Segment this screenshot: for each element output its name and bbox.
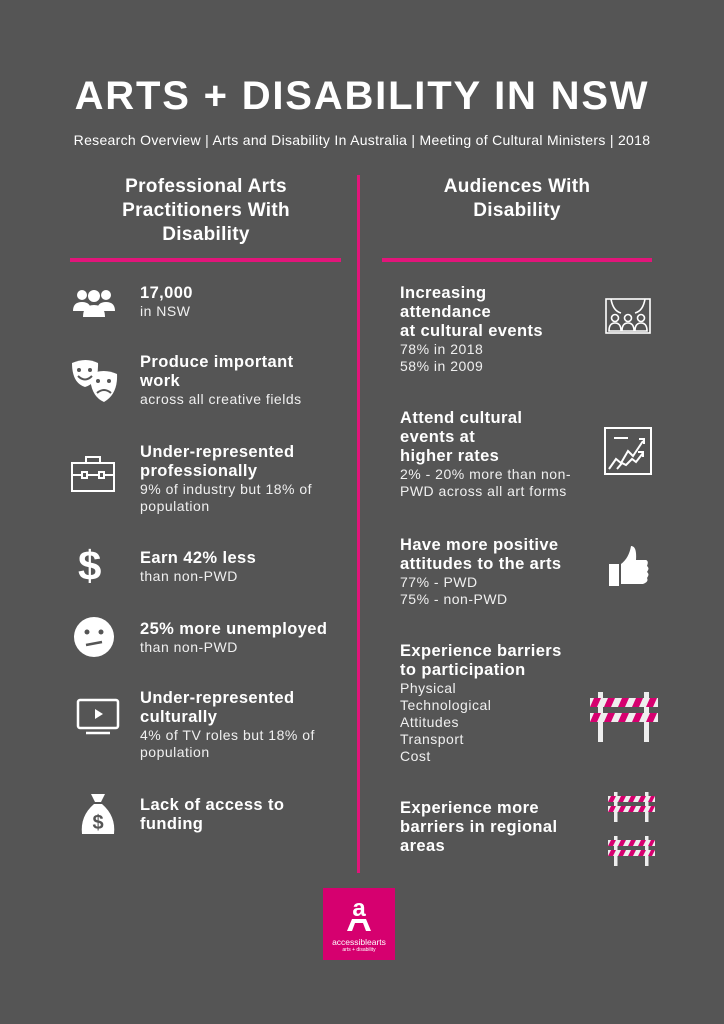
text: under-represented professionally: population [140,498,210,514]
text: unemployed [140,620,327,655]
text: positive attitudes: 75% - non-PWD [400,591,508,607]
heading: practitioners: Disability [162,224,250,245]
text: produce important work: work [140,372,180,390]
text: 17,000 [140,284,193,319]
text: under-represented professionally [140,443,312,514]
text: under-represented culturally: culturally [140,708,217,726]
text: 17,000: in NSW [140,303,190,319]
text: under-represented professionally: professionally [140,462,257,480]
text: barriers: Technological [400,697,491,713]
text: barriers: Cost [400,748,431,764]
text: positive attitudes: attitudes to the arts [400,555,562,573]
text: earn less: Earn 42% less [140,549,256,567]
vertical divider [357,175,360,873]
text: increasing attendance [400,284,543,374]
text: barriers: Experience barriers [400,642,562,660]
icon: masks [72,360,118,402]
text: under-represented professionally: Under-represented [140,443,294,461]
text: produce important work: Produce important [140,353,293,371]
icon: money bag [82,794,114,834]
icon: barriers small [608,792,655,866]
text: produce important work: across all creative fields [140,391,302,407]
text: under-represented culturally: population [140,744,210,760]
text: regional barriers [400,799,557,855]
title: ARTS + DISABILITY IN NSW [75,74,649,118]
panel: practitioners [71,284,327,834]
text: positive attitudes: 77% - PWD [400,574,478,590]
text: attend at higher rates: Attend cultural [400,409,522,427]
icon: barrier large [590,692,658,742]
text: under-represented professionally: 9% of industry but 18% of [140,481,312,497]
icon: briefcase [71,456,115,492]
icon: chart [604,427,652,475]
text: under-represented culturally: Under-represented [140,689,294,707]
text: increasing attendance: 58% in 2009 [400,358,483,374]
icon: theatre [605,298,651,334]
text: increasing attendance: attendance [400,303,491,321]
panel: audiences [400,284,658,866]
text: increasing attendance: at cultural events [400,322,543,340]
heading: practitioners: Practitioners With [122,200,290,221]
icon: dollar: $ [78,542,101,589]
text: lack of funding: Lack of access to [140,796,284,814]
icon: people [73,290,115,317]
text: barriers [400,642,562,764]
text: regional barriers: areas [400,837,445,855]
text: positive attitudes [400,536,562,607]
text: increasing attendance: 78% in 2018 [400,341,483,357]
text: earn less [140,549,256,584]
heading: audiences: Audiences With [444,176,590,197]
text: barriers: to participation [400,661,526,679]
text: attend at higher rates: higher rates [400,447,499,465]
logo: accessible arts: arts + disability [342,947,376,953]
logo: accessible arts: a [352,895,366,922]
text: 17,000: 17,000 [140,284,193,302]
text: barriers: Physical [400,680,456,696]
text: unemployed: 25% more unemployed [140,620,327,638]
text: unemployed: than non-PWD [140,639,238,655]
heading: audiences [444,176,590,221]
icon: sad face [74,617,114,657]
pink underline left [70,258,341,262]
subtitle: Research Overview | Arts and Disability In Australia | Meeting of Cultural Ministers | 2018 [74,132,650,148]
logo: accessible arts: accessiblearts [332,937,386,947]
text: attend at higher rates [400,409,571,499]
text: barriers: Transport [400,731,464,747]
heading: audiences: Disability [473,200,561,221]
text: attend at higher rates: PWD across all art forms [400,483,567,499]
logo: accessible arts [323,888,395,960]
icon: thumbs up [609,546,648,586]
text: produce important work [140,353,302,407]
text: under-represented culturally [140,689,315,760]
text: under-represented culturally: 4% of TV roles but 18% of [140,727,315,743]
heading: practitioners [122,176,290,245]
text: attend at higher rates: events at [400,428,475,446]
text: increasing attendance: Increasing [400,284,487,302]
text: earn less: than non-PWD [140,568,238,584]
text: regional barriers: barriers in regional [400,818,557,836]
icon: money bag: $ [92,812,104,834]
text: lack of funding: funding [140,815,203,833]
heading: practitioners: Professional Arts [125,176,287,197]
text: positive attitudes: Have more positive [400,536,559,554]
text: attend at higher rates: 2% - 20% more than non- [400,466,571,482]
text: regional barriers: Experience more [400,799,539,817]
icon: tv [76,698,120,734]
text: lack of funding [140,796,284,833]
text: barriers: Attitudes [400,714,459,730]
pink underline right [382,258,652,262]
